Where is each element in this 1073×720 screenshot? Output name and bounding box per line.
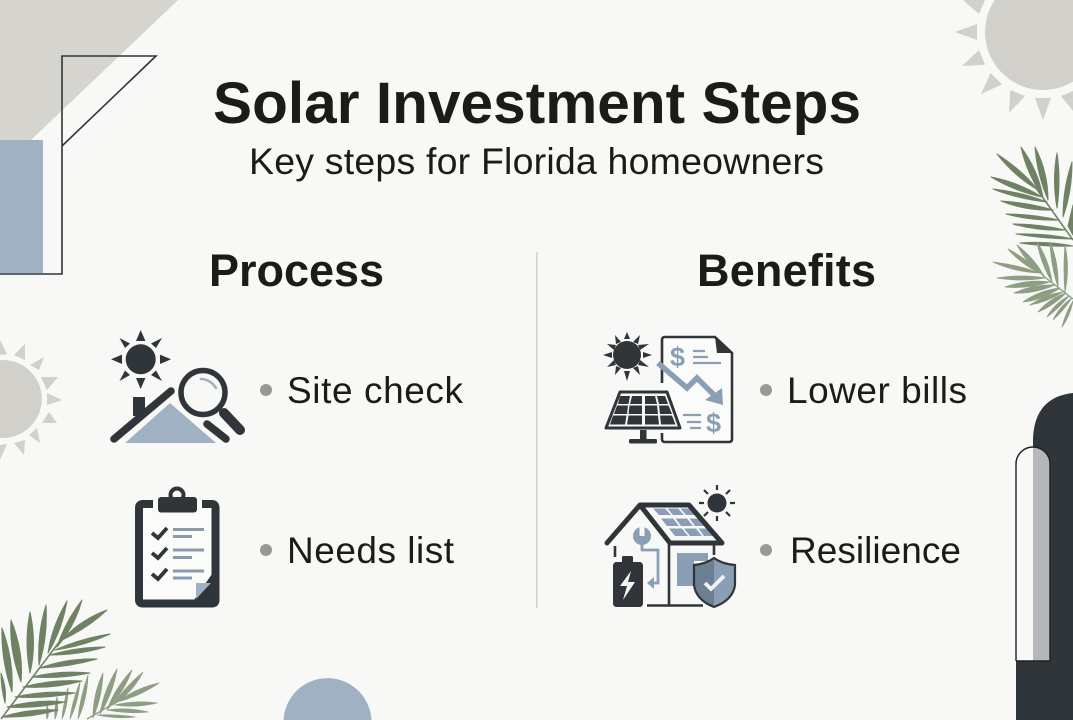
bullet [760,384,772,396]
divider [536,252,538,608]
icon: sun over roof with magnifier [111,330,240,443]
heading: benefits: Benefits [697,245,876,296]
decoration: right palm frond, lower [993,242,1073,327]
decoration: bottom blue circle [284,678,371,720]
decoration: top-left geometric shapes [0,0,178,274]
panel: process [111,245,464,604]
decoration: left sun [0,340,62,460]
label: site check: Site check [287,370,464,411]
bullet [760,544,772,556]
decoration: bottom-left palm frond, front [1,600,110,719]
icon: solar home with battery and shield [607,485,735,607]
heading: process: Process [209,245,384,296]
label: lower bills: Lower bills [787,370,967,411]
icon: solar panel with falling bill: $ [706,408,721,438]
label: resilience: Resilience [790,530,961,571]
decoration: right palm frond, upper [991,147,1073,246]
panel: benefits [603,245,967,607]
icon: solar panel with falling bill: $ [670,342,685,372]
icon: clipboard checklist [139,488,216,604]
bullet [260,384,272,396]
decoration: bottom-left palm frond, back [46,669,159,719]
subtitle: Key steps for Florida homeowners [249,140,824,182]
decoration: bottom-right dark arch and pill [1016,393,1073,720]
title: Solar Investment Steps [213,71,861,136]
icon: solar panel with falling bill [603,332,732,444]
label: needs list: Needs list [287,530,455,571]
decoration: top-right sun [955,0,1073,120]
bullet [260,544,272,556]
